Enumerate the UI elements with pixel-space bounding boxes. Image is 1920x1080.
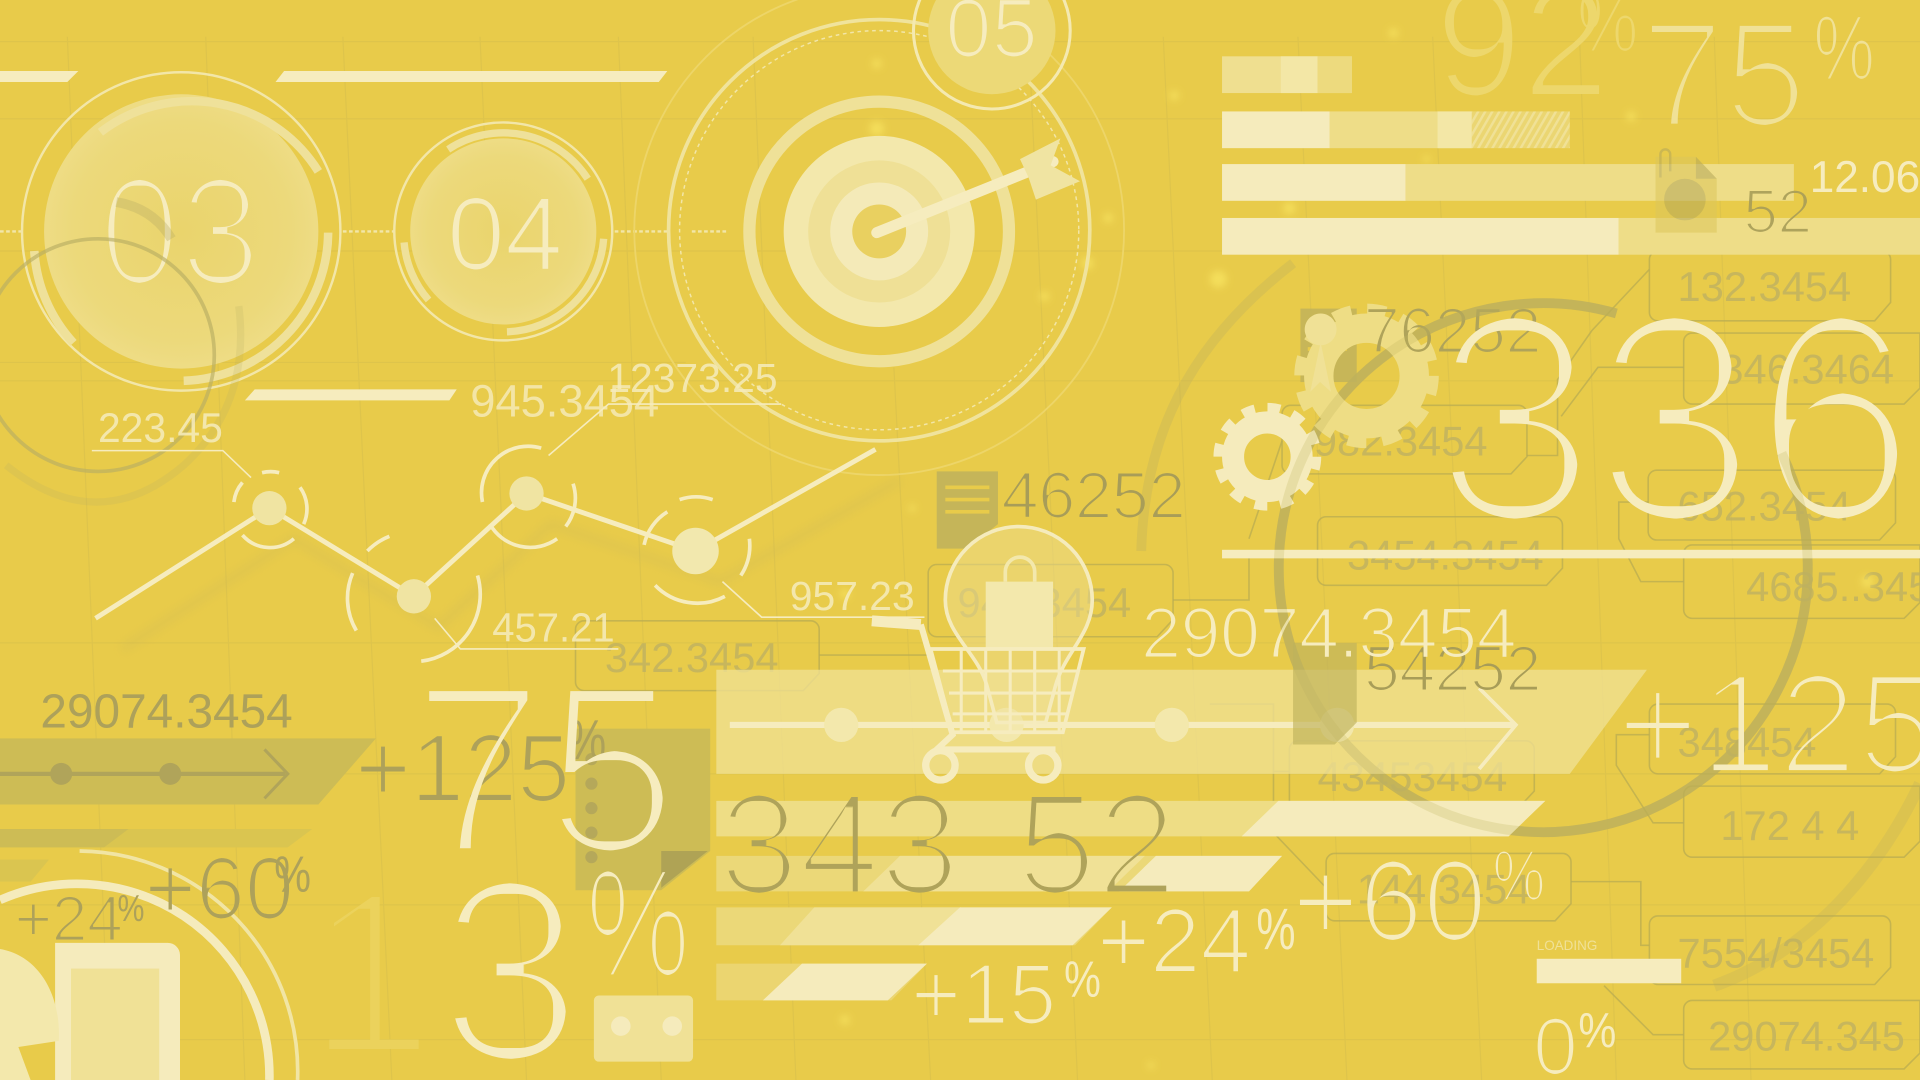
- stripe 2: [716, 856, 1282, 891]
- label 223.45: [92, 404, 251, 478]
- loading bar: [1537, 959, 1681, 983]
- shopping bag: [986, 582, 1053, 649]
- label 12.06: 12.06: [1810, 153, 1920, 202]
- dark arc overlay: [1279, 303, 1808, 832]
- icon: document dark: [1656, 149, 1717, 233]
- bottom left circular device: [0, 851, 298, 1080]
- stat 0%: [1533, 1002, 1616, 1080]
- gear small: [1220, 409, 1315, 504]
- number 04: 04: [447, 176, 563, 292]
- stat +60% dark: +60: [144, 838, 294, 937]
- tablet: [55, 943, 180, 1080]
- dotted connector: [0, 230, 729, 232]
- label 12373.25: [549, 355, 781, 456]
- shopping cart: [872, 621, 1084, 780]
- big stat 3%: [438, 826, 691, 1080]
- box: 982.3454: 982.3454: [1314, 418, 1488, 465]
- light bulb: [945, 527, 1092, 722]
- big number 75: 75: [411, 635, 678, 903]
- box: 43453454: 43453454: [1318, 753, 1507, 800]
- box: 29074.345: 29074.345: [1708, 1013, 1905, 1060]
- label 54252: 54252: [1364, 634, 1541, 705]
- label 76252: 76252: [1364, 296, 1541, 367]
- circle badge 04: [394, 122, 612, 340]
- label 957.23: 957.23: [790, 573, 915, 619]
- chart shadow: [122, 480, 900, 649]
- label 46252: 46252: [1002, 459, 1185, 533]
- number 03: 03: [99, 146, 261, 317]
- stat 75%: %: [1813, 0, 1875, 100]
- slanted accent bars: [0, 71, 667, 400]
- chart line: [96, 449, 876, 618]
- light band with timeline: [716, 670, 1647, 774]
- main arc: [0, 884, 269, 1080]
- loading indicator: [1537, 938, 1681, 983]
- stat +15%: %: [1064, 950, 1101, 1008]
- box: 652.3454: 652.3454: [1678, 482, 1851, 529]
- box: 144.3454: [1326, 853, 1571, 921]
- bar 1: [1222, 56, 1352, 93]
- dark ring left: [0, 202, 241, 502]
- label 343 52: 52: [1016, 763, 1177, 925]
- label 957.23: [722, 573, 924, 619]
- stat 0%: %: [1578, 1004, 1616, 1058]
- circle badge 05: [913, 0, 1070, 109]
- data boxes: [576, 251, 1920, 1069]
- box: 4685.3454: [1684, 545, 1920, 618]
- big stat 3%: %: [585, 838, 691, 1009]
- icon: small card: [594, 996, 693, 1062]
- arrow in target: [877, 138, 1080, 233]
- box: 652.3454: [1648, 470, 1896, 540]
- box: 172 4 4: [1684, 786, 1920, 857]
- icon: award ribbon: [1305, 313, 1337, 392]
- label 12373.25: 12373.25: [607, 355, 778, 401]
- stat +15%: +15: [911, 947, 1056, 1043]
- label 223.45: 223.45: [98, 404, 223, 451]
- connector lines: [819, 269, 1684, 1035]
- document icon: [937, 471, 998, 549]
- label 457.21: [435, 605, 618, 651]
- outer arc: [80, 851, 298, 1080]
- box: 342.3454: [576, 621, 819, 691]
- box: 132.3454: 132.3454: [1678, 263, 1851, 310]
- label 29074.3454 dark: 29074.3454: [40, 685, 293, 738]
- stat +24%: +24: [1097, 891, 1251, 992]
- line chart with callouts: [92, 355, 924, 661]
- bar 3: [1222, 164, 1794, 201]
- icon: document and 46252: [937, 459, 1185, 549]
- box: 144.3454: 144.3454: [1357, 866, 1530, 913]
- stat +125% dark: +125: [355, 716, 570, 822]
- box: 29074.345: [1684, 1000, 1920, 1069]
- box: 132.3454: [1649, 251, 1891, 321]
- stat +24%: %: [1256, 897, 1296, 962]
- stat +60%: %: [1493, 837, 1545, 916]
- dark background arcs: [1141, 263, 1920, 986]
- label 52: 52: [1744, 178, 1812, 246]
- timeline: [730, 688, 1516, 769]
- bar 4: [1222, 218, 1920, 255]
- stat +24% dark: %: [118, 888, 144, 929]
- stat +60%: +60: [1292, 837, 1487, 965]
- dark band with arrow: [0, 738, 376, 882]
- label 343 52: [719, 763, 1177, 925]
- circle badge 03: [22, 72, 340, 391]
- gear large: [1302, 311, 1431, 441]
- gold glow particles: [840, 28, 1873, 1069]
- box: 7554/3454: [1649, 916, 1891, 984]
- stripe 3: [716, 907, 1112, 945]
- box: 7554/3454: 7554/3454: [1678, 929, 1874, 976]
- box: 945.3454: [928, 564, 1173, 637]
- box: 346.3464: 346.3464: [1720, 345, 1894, 392]
- box: 172 4 4: 172 4 4: [1720, 802, 1859, 849]
- icon: dark bookmark 54252: [1293, 643, 1357, 744]
- box: 342.3454: 342.3454: [605, 634, 779, 681]
- stripe 1: [716, 801, 1545, 836]
- label 457.21: 457.21: [492, 605, 615, 651]
- dark timeline arrow: [0, 749, 288, 798]
- box: 945.3454: 945.3454: [958, 579, 1131, 626]
- label 29074.3454 light: 29074.3454: [1141, 595, 1516, 674]
- loading label: LOADING: [1537, 938, 1597, 953]
- stat +125% dark: %: [567, 708, 606, 771]
- icon: document list dark: [1300, 309, 1357, 382]
- horizontal bar chart: [1222, 56, 1920, 255]
- stat +60% dark: %: [274, 844, 311, 902]
- target icon: [634, 0, 1124, 475]
- big number 336: 336: [1433, 252, 1912, 583]
- box: 3454.3454: 3454.3454: [1347, 531, 1544, 578]
- bar 2: [1222, 111, 1570, 148]
- box: 348454: 348454: [1678, 719, 1816, 766]
- box: 3454.3454: [1318, 517, 1562, 585]
- label 945.3454: 945.3454: [470, 375, 659, 426]
- box: 43453454: [1289, 741, 1534, 808]
- stat +24% dark: +24: [15, 883, 123, 954]
- divider bar: [1222, 550, 1920, 558]
- box: 346.3464: [1684, 333, 1920, 404]
- box: 982.3454: [1282, 405, 1527, 474]
- label 343 52: 343: [719, 763, 960, 925]
- dark document panel: [576, 729, 710, 890]
- striped parallelogram bars: [716, 801, 1545, 1000]
- box: 348454: [1649, 704, 1896, 774]
- medal: [0, 949, 59, 1080]
- icon: light bulb and shopping cart: [872, 527, 1092, 780]
- stripe 4: [716, 964, 927, 1000]
